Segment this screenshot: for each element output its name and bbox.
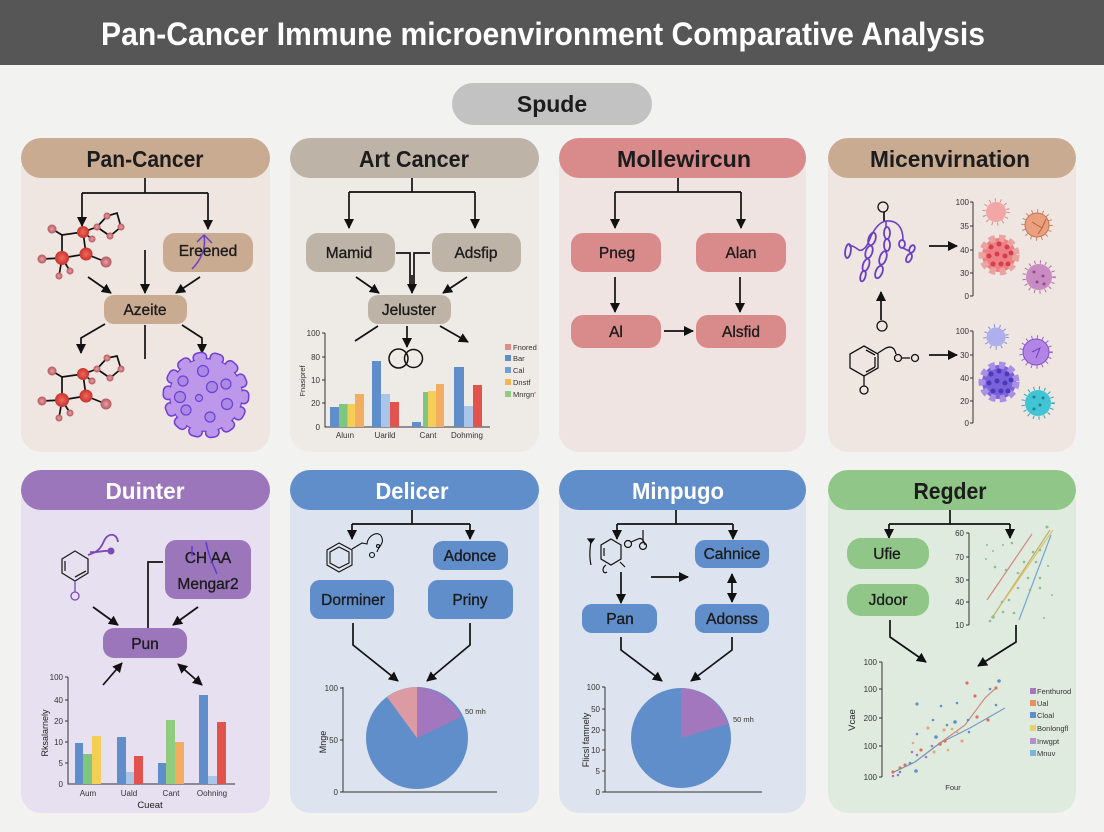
box: Adonce (433, 541, 508, 570)
arrows: to pie (621, 637, 732, 681)
heading: Mollewircun: Mollewircun (617, 146, 751, 172)
icon: benzene ring (327, 534, 382, 572)
bar chart: Duinter: 10 (54, 738, 64, 747)
arrows: Pun to chart (103, 663, 202, 685)
chart: lower cells: 100 (956, 327, 970, 336)
bar chart: Duinter: Cant (163, 789, 180, 798)
panel: Delicer (290, 470, 539, 813)
arrows: downward (615, 277, 740, 331)
heading: Micenvirnation (828, 138, 1076, 178)
arrows: into Pun (93, 562, 198, 628)
box: Adonss (695, 604, 769, 633)
box: Jeluster: Jeluster (382, 302, 436, 319)
bar chart: Art Cancer: 20 (311, 399, 321, 408)
legend: Art Cancer: Cal (513, 366, 525, 375)
arrows: out of Jeluster (355, 326, 468, 347)
pie chart: Minpugo: 50 (591, 705, 601, 714)
panel: Pan-Cancer (21, 138, 270, 452)
heading: Delicer: Delicer (376, 478, 449, 504)
heading: Minpugo (559, 470, 806, 510)
legend: Regder: Bonlongfl (1037, 724, 1069, 733)
heading: Micenvirnation: Micenvirnation (870, 146, 1030, 172)
box: Azeite: Azeite (123, 302, 167, 319)
box: Cahnice (695, 540, 769, 568)
box: Ufe: Ufie (873, 546, 901, 563)
pie chart: Delicer (318, 684, 497, 797)
icon: molecule upper (38, 212, 124, 280)
chart: lower cells: 30 (960, 351, 970, 360)
box: Pan: Pan (606, 611, 634, 628)
scatter chart: lower: Four (945, 783, 961, 792)
chart: lower cells: 40 (960, 374, 970, 383)
heading: Art Cancer (290, 138, 539, 178)
icon: ring with purple tail (62, 535, 118, 600)
box: Alan: Alan (725, 245, 757, 262)
bar chart: Art Cancer: 80 (311, 353, 321, 362)
bar chart: Art Cancer: 0 (316, 423, 321, 432)
box: Jdoor: Jdoor (869, 592, 907, 609)
pie chart: Minpugo: 0 (596, 788, 601, 797)
scatter chart: lower: 100 (864, 685, 878, 694)
arrows: top split (889, 510, 1010, 538)
box: Alan (696, 233, 786, 272)
pie chart: Minpugo: 20 (591, 726, 601, 735)
box: Adsfip (432, 233, 521, 272)
panel: Mollewircun (559, 138, 806, 452)
bar chart: Duinter: 40 (54, 696, 64, 705)
box: Dorminer (310, 580, 394, 619)
chart: upper cells: 30 (960, 269, 970, 278)
box: Ereened: Ereened (179, 243, 237, 260)
icon: benzene ring (850, 346, 918, 394)
panel: Minpugo (559, 470, 806, 813)
box: CH AA Mengar2: CH AA (185, 550, 232, 567)
pie chart: Minpugo: 5 (596, 767, 601, 776)
heading: Pan-Cancer (21, 138, 270, 178)
bar chart: Duinter: 5 (59, 759, 64, 768)
chart: lower cells: 20 (960, 397, 970, 406)
panel: Regder (828, 470, 1076, 813)
bar chart: Duinter: Cueat (137, 800, 163, 811)
box: Jdoor (847, 584, 929, 616)
icon: ring structure (588, 530, 646, 573)
box: Pun: Pun (131, 636, 159, 653)
arrows: top split (615, 178, 741, 228)
icon: linked circles (389, 349, 422, 368)
bar chart: Duinter: 100 (50, 673, 64, 682)
pie chart: Delicer: Mnge (318, 731, 328, 753)
arrows: to lower scatter (890, 620, 1016, 666)
box: Dorminer: Dorminer (321, 592, 385, 609)
chart: upper cells: 35 (960, 222, 970, 231)
pie chart: Delicer: 100 (325, 684, 339, 693)
bar chart: Duinter (40, 673, 235, 811)
legend: Art Cancer: Mnrgn' (513, 390, 536, 399)
chart: lower cells (956, 326, 1053, 428)
heading: Minpugo: Minpugo (632, 478, 724, 504)
bar chart: Duinter: Uald (121, 789, 137, 798)
bar chart: Art Cancer: Uarild (375, 431, 395, 440)
arrows: top split (82, 178, 208, 229)
box: Jeluster (368, 295, 451, 324)
pie chart: Delicer: 0 (334, 788, 339, 797)
box: Al: Al (609, 324, 623, 341)
arrows: top split (349, 178, 475, 228)
box: Cahnice: Cahnice (704, 546, 760, 563)
scatter chart: lower: 100 (864, 658, 878, 667)
heading: Duinter (21, 470, 270, 510)
box: Pneg (571, 233, 661, 272)
box: Adonss: Adonss (706, 611, 758, 628)
box: Adonce: Adonce (444, 548, 496, 565)
icon: purple virus (168, 357, 244, 433)
bar chart: Art Cancer: Dohming (451, 431, 483, 440)
subtitle pill (452, 83, 652, 125)
pie chart: Minpugo: Flicsl famnely (581, 712, 591, 767)
panel: Duinter (21, 470, 270, 813)
bar chart: Duinter: Rksalarnely (40, 709, 50, 757)
legend: Art Cancer: Bar (513, 354, 525, 363)
arrows: out of Azeite (81, 324, 202, 359)
panel: Micenvirnation (828, 138, 1076, 452)
bar chart: Art Cancer: Cant (420, 431, 437, 440)
box: Pneg: Pneg (599, 245, 635, 262)
scatter chart: upper: 60 (955, 529, 965, 538)
scatter chart: lower: 100 (864, 773, 878, 782)
legend: Regder (1030, 687, 1071, 758)
box: Alsfid: Alsfid (722, 324, 760, 341)
heading: Regder (828, 470, 1076, 510)
icon: molecule lower (38, 354, 124, 422)
bar chart: Art Cancer: 100 (307, 329, 321, 338)
legend: Art Cancer (505, 343, 537, 399)
chart: lower cells: 0 (965, 419, 970, 428)
box: Mamid (306, 233, 395, 272)
box: Ufe (847, 538, 929, 569)
arrows: to pie (353, 623, 470, 681)
box: CH AA Mengar2: Mengar2 (177, 576, 239, 593)
chart: upper cells: 40 (960, 246, 970, 255)
arrows: middle (621, 572, 732, 603)
scatter chart: upper: 40 (955, 598, 965, 607)
bar chart: Art Cancer: Aluın (336, 431, 354, 440)
bar chart: Duinter: 0 (59, 780, 64, 789)
heading: Art Cancer: Art Cancer (359, 146, 469, 172)
box: Adsfip: Adsfip (454, 245, 498, 262)
scatter chart: lower: Vcae (847, 709, 858, 731)
bar chart: Art Cancer: Fnasipref (298, 364, 307, 397)
chart: upper cells: 100 (956, 198, 970, 207)
pie chart: Delicer: 50 mh (465, 707, 486, 716)
arrow: to upper cells (929, 245, 957, 247)
bar chart: Art Cancer: 10 (311, 376, 321, 385)
heading: Pan-Cancer: Pan-Cancer (86, 146, 204, 172)
legend: Regder: Fenthurod (1037, 687, 1071, 696)
arrows: into Azeite (88, 250, 200, 293)
chart: upper cells: 0 (965, 292, 970, 301)
heading: Delicer (290, 470, 539, 510)
box: Mamid: Mamid (326, 245, 372, 262)
arrows: top split (352, 510, 470, 539)
chart: upper cells (956, 198, 1054, 301)
pie chart: Minpugo: 50 mh (733, 715, 754, 724)
heading: Duinter: Duinter (106, 478, 185, 504)
title bar: Pan-Cancer Immune microenvironment Comparative Analysis (101, 16, 985, 52)
box: Priny (428, 580, 513, 619)
legend: Regder: Mnuv (1037, 749, 1056, 758)
scatter chart: upper: 70 (955, 553, 965, 562)
legend: Art Cancer: Fnored (513, 343, 537, 352)
legend: Art Cancer: Dnstf (513, 378, 531, 387)
bar chart: Duinter: Oohning (197, 789, 227, 798)
box: Pun (103, 628, 187, 658)
pie chart: Minpugo: 100 (587, 683, 601, 692)
bar chart: Duinter: Aum (80, 789, 97, 798)
icon: purple strand molecule (844, 202, 916, 282)
scatter chart: upper: 10 (955, 621, 965, 630)
arrow: upward with node (877, 292, 887, 331)
legend: Regder: Inwgpt (1037, 737, 1060, 746)
pie chart: Minpugo (581, 683, 762, 797)
arrows: merge to Jeluster (356, 253, 467, 293)
box: Alsfid (696, 315, 786, 348)
legend: Regder: Ual (1037, 699, 1049, 708)
heading: Regder: Regder (914, 478, 987, 504)
panel: Art Cancer (290, 138, 539, 452)
box: CH AA Mengar2 (165, 540, 251, 599)
pie chart: Minpugo: 10 (591, 746, 601, 755)
pie chart: Delicer: 50 (329, 736, 339, 745)
scatter chart: lower: 200 (864, 714, 878, 723)
box: Ereened (163, 233, 253, 272)
scatter chart: upper: 30 (955, 576, 965, 585)
bar chart: Art Cancer (298, 329, 490, 440)
legend: Regder: Cloal (1037, 711, 1054, 720)
heading: Mollewircun (559, 138, 806, 178)
subtitle pill: Spude (517, 91, 587, 117)
title bar (0, 0, 1104, 65)
arrows: top split (617, 510, 733, 539)
box: Pan (582, 604, 657, 633)
scatter chart: upper (955, 526, 1053, 630)
arrow: to lower cells (929, 354, 957, 356)
scatter chart: lower (847, 658, 1005, 792)
box: Azeite (104, 295, 187, 324)
box: Al (571, 315, 661, 348)
scatter chart: lower: 100 (864, 742, 878, 751)
bar chart: Duinter: 20 (54, 717, 64, 726)
box: Priny: Priny (452, 592, 488, 609)
